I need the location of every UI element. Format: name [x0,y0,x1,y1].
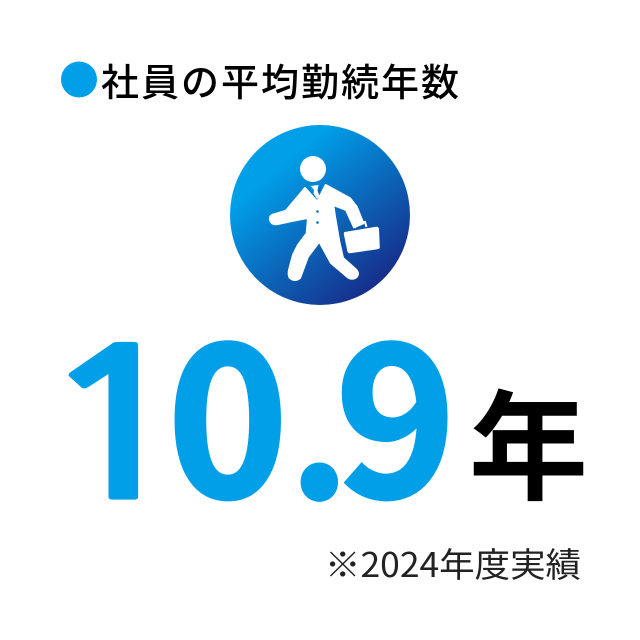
big number: 9 [335,259,457,557]
big number [33,259,457,559]
icon: walking businessman with briefcase [230,125,410,305]
big number: 1 [33,325,201,530]
unit: 年 [469,353,588,525]
big number: 0 [167,259,289,557]
heading: 社員の平均勤続年数 [101,52,461,107]
footnote: ※2024年度実績 [325,538,581,587]
heading bullet [61,62,97,98]
big number: . [286,262,353,559]
